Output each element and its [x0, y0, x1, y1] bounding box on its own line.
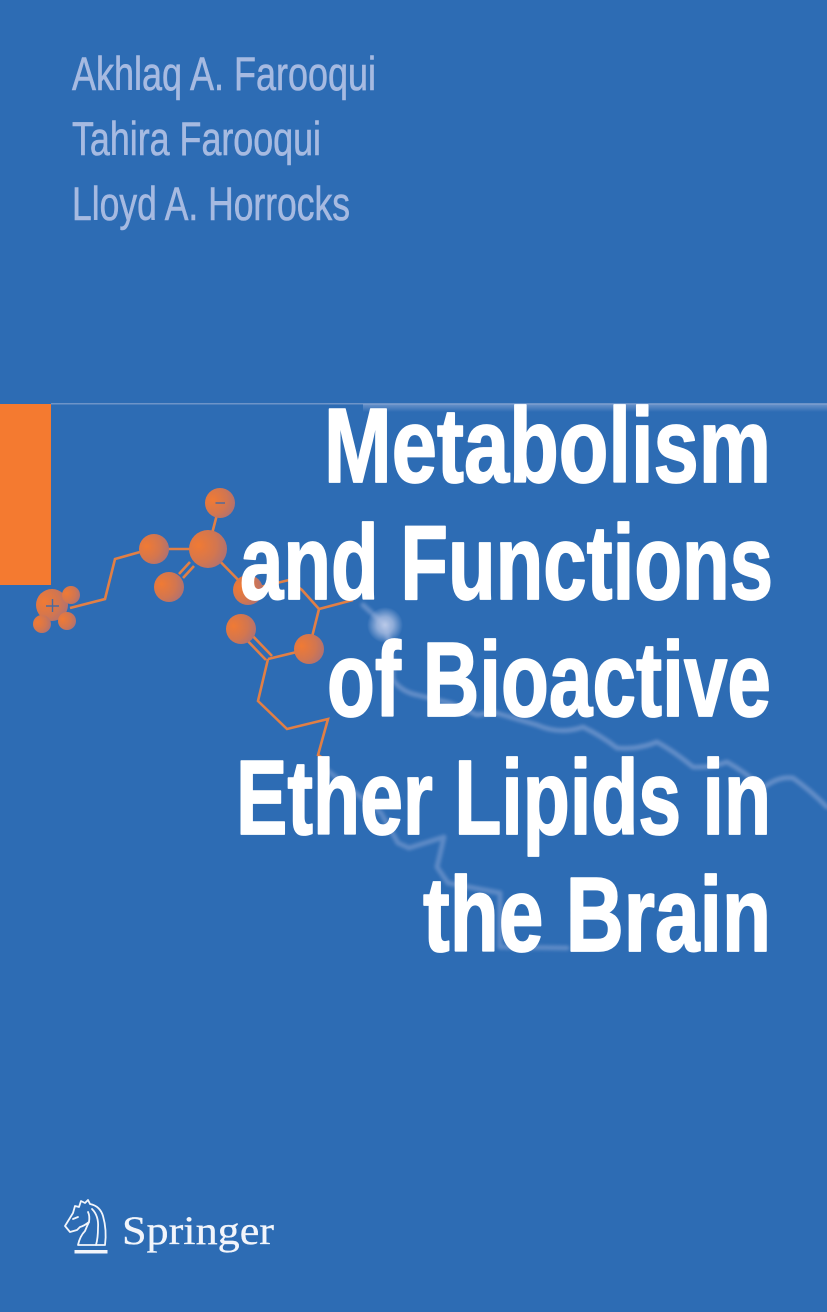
- authors: Akhlaq A. Farooqui: [72, 47, 376, 100]
- title: [236, 387, 773, 974]
- molecule bonds: [70, 503, 353, 762]
- orange accent block: [0, 404, 51, 585]
- horizontal rule: [51, 403, 827, 412]
- publisher logo: [65, 1200, 274, 1254]
- wordmark: Springer: [122, 1208, 274, 1253]
- glowing chain: [323, 605, 827, 948]
- authors: Lloyd A. Horrocks: [72, 177, 350, 230]
- authors: [72, 47, 376, 230]
- authors: Tahira Farooqui: [72, 112, 321, 165]
- icon: Springer horse head: [65, 1200, 108, 1254]
- molecule atoms: [33, 488, 324, 664]
- charge signs: [46, 503, 225, 612]
- molecule: [33, 488, 353, 762]
